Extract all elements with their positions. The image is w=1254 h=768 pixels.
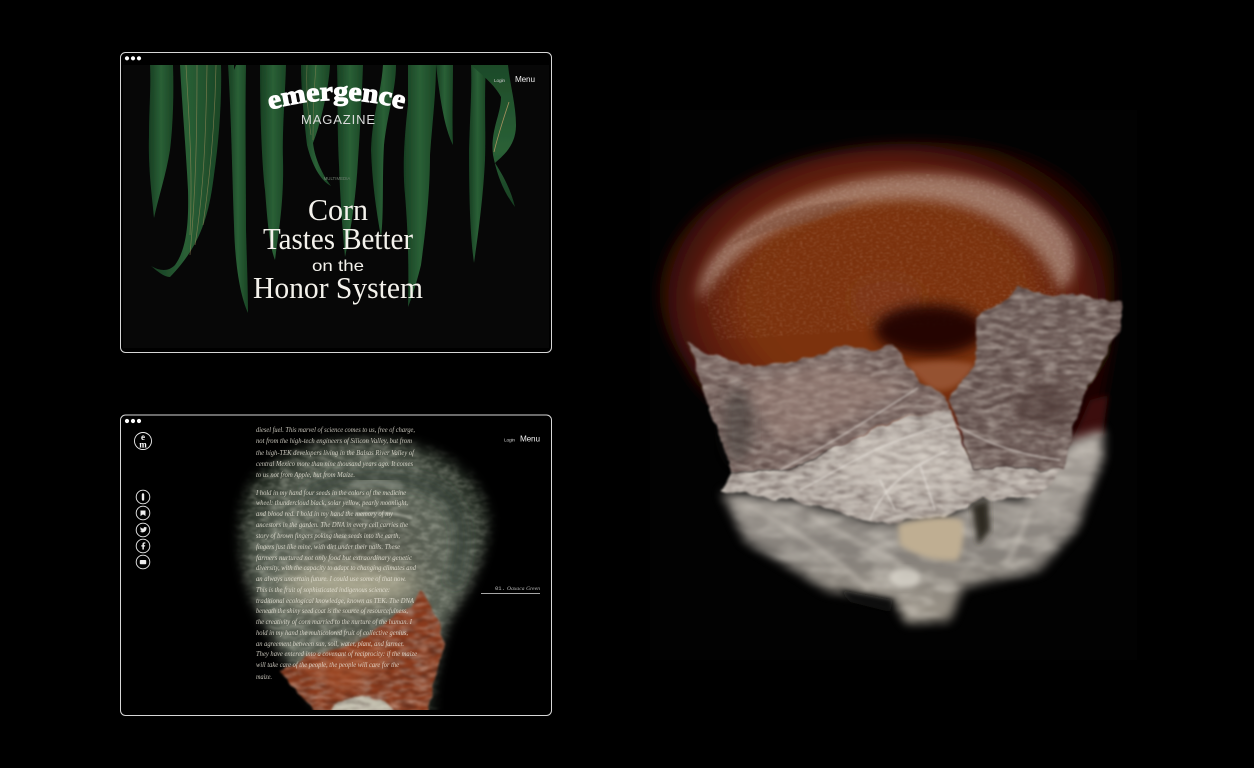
panel: article reading screen — [120, 415, 552, 716]
window dots — [125, 56, 141, 60]
seed: cream germ — [898, 518, 963, 560]
article text: This is the fruit of sophisticated indigenous science: — [256, 585, 390, 594]
article text: story of brown fingers poking these seeds into the earth, — [256, 531, 400, 540]
article text: fingers just like mine, with dirt under their nails. These — [256, 542, 401, 551]
article text: central Mexico more than nine thousand years ago. It comes — [256, 459, 413, 468]
em round logo: e — [141, 432, 145, 442]
corn leaves illustration — [149, 65, 516, 313]
nav: menu: Menu — [515, 75, 535, 84]
article text: an agreement between sun, soil, water, plant, and farmer. — [256, 639, 404, 648]
article text: traditional ecological knowledge, known as TEK. The DNA — [256, 596, 414, 605]
photo: large corn seed close-up — [650, 110, 1137, 660]
seed: soft folds in lower body — [745, 505, 1030, 590]
article text: diversity, with the capacity to adapt to changing climates and — [256, 563, 416, 572]
article text: They have entered into a covenant of reciprocity: if the maize — [256, 649, 418, 658]
logo: emergence — [268, 86, 406, 109]
em round logo: m — [139, 440, 147, 450]
article text: will take care of the people, the people will care for the — [256, 660, 400, 669]
seed: translucent left skin — [688, 343, 950, 473]
article text: ancestors in the garden. The DNA in every cell carries the — [256, 520, 409, 529]
article text: not from the high-tech engineers of Silicon Valley, but from — [256, 436, 412, 445]
article text: hold in my hand the multicolored fruit of collective genius, — [256, 628, 408, 637]
article text — [255, 425, 418, 681]
article text: wheel: thundercloud black, solar yellow, pearly moonlight, — [256, 498, 408, 507]
article text: to us not from Apple, but from Maize. — [256, 470, 355, 479]
headline: on the — [312, 258, 364, 275]
window dots — [125, 419, 141, 423]
article text: maize. — [256, 672, 272, 681]
seed: translucent right skin — [950, 288, 1123, 470]
seed caption: Oaxaca Green — [507, 586, 540, 592]
headline: Corn — [308, 192, 368, 227]
article text: farmers nurtured not only food but extraordinary genetic — [256, 553, 413, 562]
article text: I hold in my hand four seeds in the colors of the medicine — [255, 488, 407, 497]
shadow in kernel — [875, 305, 985, 355]
seed: dark cleft — [972, 500, 990, 545]
nav: login: Login — [504, 438, 515, 444]
category label: MULTIMEDIA — [324, 176, 350, 181]
article text: diesel fuel. This marvel of science comes to us, free of charge, — [256, 425, 415, 434]
headline — [253, 192, 423, 305]
seed caption: 01. — [495, 585, 505, 592]
seed: bright fold at base — [889, 568, 921, 588]
logo: emergence: emergence — [268, 86, 406, 109]
article text: the high-TEK developers living in the Balsas River Valley of — [256, 448, 415, 457]
infographic canvas — [120, 52, 1124, 716]
logo: magazine: MAGAZINE — [301, 112, 375, 127]
seed: white wrinkled membrane — [720, 410, 1063, 523]
nav: menu: Menu — [520, 434, 540, 444]
nav: login: Login — [494, 78, 505, 84]
seed caption — [481, 585, 540, 594]
panel: magazine cover screen — [120, 52, 552, 353]
headline: Honor System — [253, 270, 423, 305]
seed: pale lower body — [722, 430, 1103, 623]
em round logo — [134, 432, 152, 450]
article text: an always uncertain future. I could use some of that now. — [256, 574, 406, 583]
article text: the creativity of corn married to the nurture of the human. I — [256, 617, 413, 626]
share icons — [136, 490, 150, 569]
headline: Tastes Better — [263, 221, 414, 256]
highlight on kernel — [698, 174, 1075, 300]
seed: brown kernel — [660, 143, 1114, 470]
corn seed photo — [241, 439, 488, 715]
article text: and blood red. I hold in my hand the memory of my — [256, 509, 394, 518]
article text: beneath the shiny seed coat is the source of resourcefulness, — [256, 606, 408, 615]
